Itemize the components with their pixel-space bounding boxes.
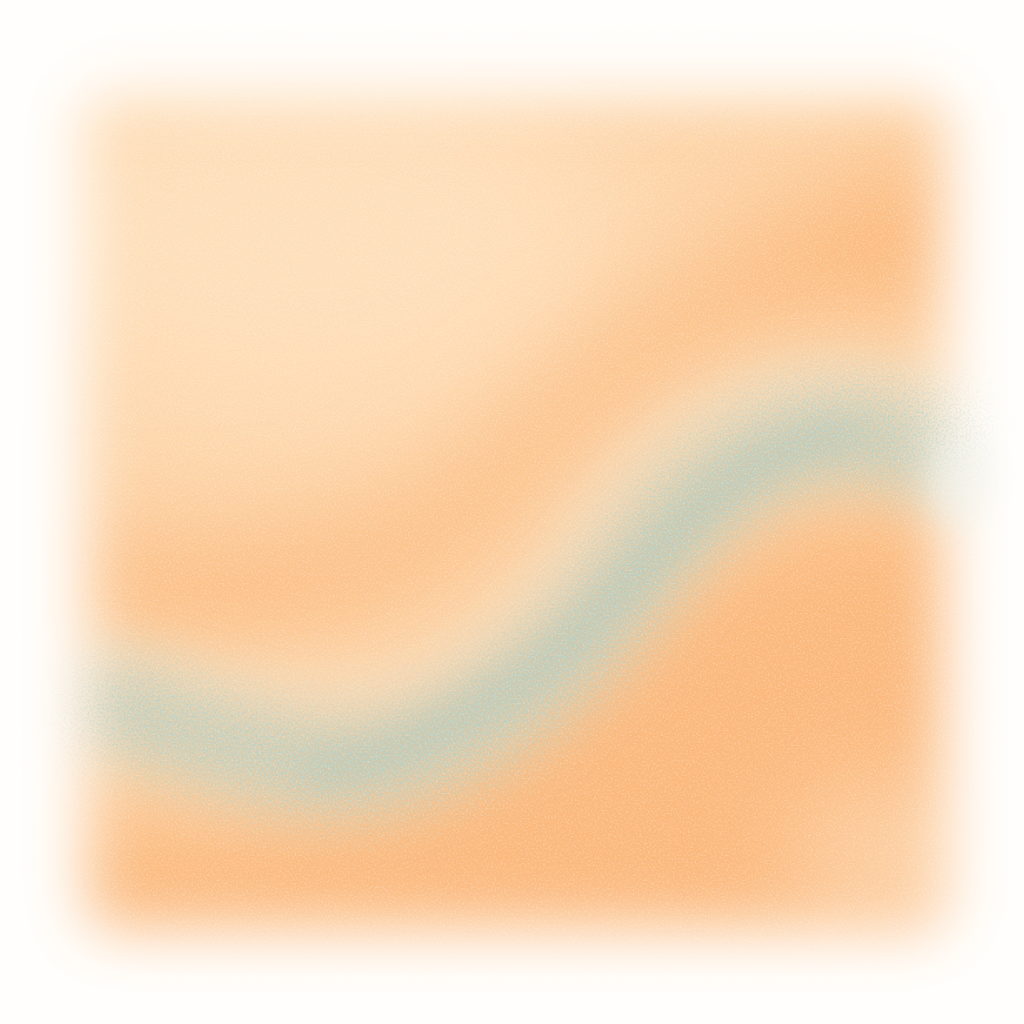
teal wave: [70, 440, 990, 763]
upper orange band: [60, 150, 990, 635]
lower-right lighter patch: [790, 780, 1010, 940]
cream halo above the wave: [60, 390, 1000, 705]
base peach field: [48, 72, 982, 898]
teal speckle on wave: [64, 346, 990, 850]
right edge pale fade of the wave: [932, 435, 988, 525]
light upper-left glow: [83, 106, 615, 430]
top edge fade: [100, 57, 938, 118]
teal wave core: [300, 430, 860, 770]
lower orange field: [70, 485, 964, 952]
